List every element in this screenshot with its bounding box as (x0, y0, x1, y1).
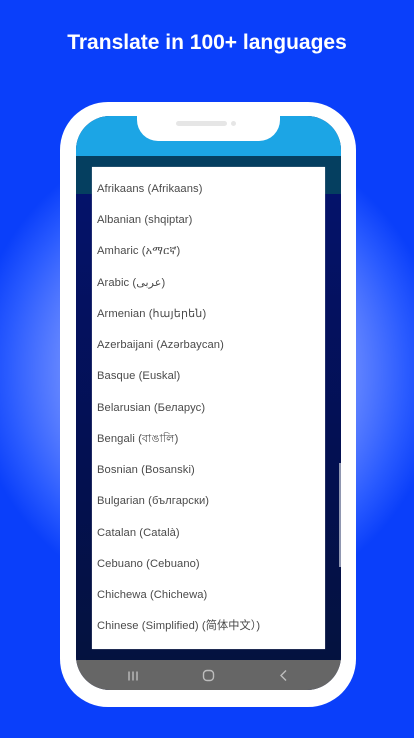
status bar (76, 116, 341, 156)
dimmed app content (76, 194, 341, 660)
language: Afrikaans: Afrikaans (Afrikaans) (97, 183, 203, 195)
icon: back (280, 670, 286, 681)
language list dialog (92, 167, 325, 649)
speaker (176, 121, 227, 126)
language: Belarusian: Belarusian (Беларус) (97, 402, 205, 414)
icon: recent apps (128, 672, 138, 680)
phone screen (76, 116, 341, 690)
language: Bulgarian: Bulgarian (български) (97, 495, 209, 507)
language: Catalan: Catalan (Català) (97, 527, 180, 539)
language: Arabic: Arabic (عربى) (97, 277, 165, 289)
language: Bosnian: Bosnian (Bosanski) (97, 464, 195, 476)
language: Basque: Basque (Euskal) (97, 370, 180, 382)
language: Chinese Simplified: Chinese (Simplified) (简体中文）) (97, 620, 260, 632)
phone frame (60, 102, 356, 707)
navigation bar (76, 660, 341, 690)
scrollbar (339, 463, 341, 567)
language: Albanian: Albanian (shqiptar) (97, 214, 192, 226)
language: Armenian: Armenian (հայերեն) (97, 308, 206, 320)
camera (231, 121, 236, 126)
title: Translate in 100+ languages (67, 31, 347, 54)
phone notch (137, 112, 280, 141)
language: Cebuano: Cebuano (Cebuano) (97, 558, 200, 570)
language: Bengali: Bengali (বাঙালি) (97, 433, 178, 445)
language: Amharic: Amharic (አማርኛ) (97, 245, 180, 257)
language: Chichewa: Chichewa (Chichewa) (97, 589, 207, 601)
app header (76, 156, 341, 194)
icon: home (202, 670, 214, 682)
language: Azerbaijani: Azerbaijani (Azərbaycan) (97, 339, 224, 351)
